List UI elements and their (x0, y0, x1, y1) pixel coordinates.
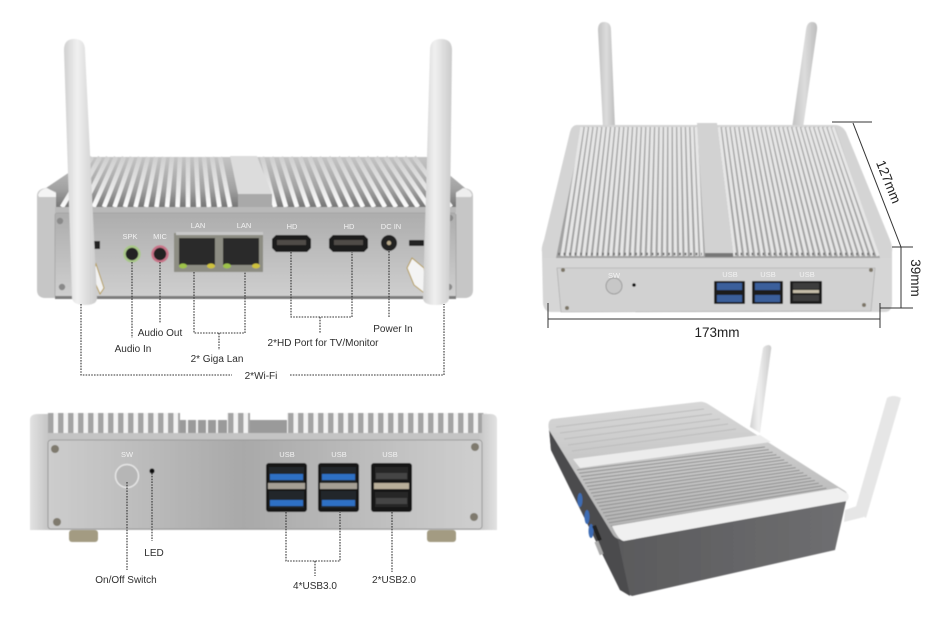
dotted callout lines: rear ports (81, 251, 444, 375)
dimension: height 39mm: 39mm (908, 259, 923, 297)
front device photo (30, 413, 497, 542)
port labels on dimensions view: USB (799, 270, 815, 279)
port labels on dimensions view: USB (722, 270, 738, 279)
port labels on front plate: SW (121, 450, 134, 459)
rear device photo (37, 39, 473, 305)
callout: On/Off Switch: On/Off Switch (95, 575, 157, 586)
callout: LED: LED (144, 548, 164, 559)
callout: Power In: Power In (373, 324, 413, 335)
dimension: depth 127mm: 127mm (873, 158, 904, 205)
panel: rear view with ports (37, 39, 473, 382)
port labels on dimensions view (608, 270, 815, 280)
port labels on front plate: USB (279, 450, 295, 459)
port labels on dimensions view: USB (760, 270, 776, 279)
dotted callout lines: front ports (127, 473, 392, 576)
callout: 2*HD Port: 2*HD Port for TV/Monitor (268, 338, 379, 349)
dimension: width 173mm: 173mm (694, 325, 740, 340)
callout: 2*USB2.0: 2*USB2.0 (372, 575, 416, 586)
callout: Audio Out: Audio Out (138, 328, 182, 339)
port labels on rear plate (122, 221, 401, 241)
port labels on dimensions view: SW (608, 271, 621, 280)
heat-sink top face (548, 402, 849, 541)
panel: angled product photo (548, 345, 901, 596)
dimension: width 173mm (548, 303, 880, 340)
port labels on front plate (121, 450, 398, 459)
port labels on front plate: USB (382, 450, 398, 459)
port labels on rear plate: DC IN (381, 222, 401, 231)
panel: dimensions view (542, 22, 923, 340)
callout: 2*Wi-Fi: 2*Wi-Fi (245, 371, 277, 382)
side and front dark faces (549, 428, 847, 596)
port labels on rear plate: HD (287, 222, 298, 231)
antenna: back (750, 345, 771, 433)
port labels on front plate: USB (331, 450, 347, 459)
port labels on rear plate: MIC (153, 232, 167, 241)
dimension: depth 127mm (832, 122, 913, 247)
port labels on rear plate: LAN (237, 221, 251, 230)
antenna: right (844, 396, 901, 522)
port labels on rear plate: SPK (122, 232, 138, 241)
dimension: height 39mm (880, 247, 923, 308)
callout: Audio In: Audio In (115, 344, 151, 355)
callout: 4*USB3.0: 4*USB3.0 (293, 581, 337, 592)
port labels on rear plate: LAN (191, 221, 205, 230)
port labels on rear plate: HD (344, 222, 355, 231)
dimensioned device photo (542, 22, 892, 312)
callout: 2* Giga Lan: 2* Giga Lan (191, 354, 243, 365)
panel: front view with ports (30, 413, 497, 592)
